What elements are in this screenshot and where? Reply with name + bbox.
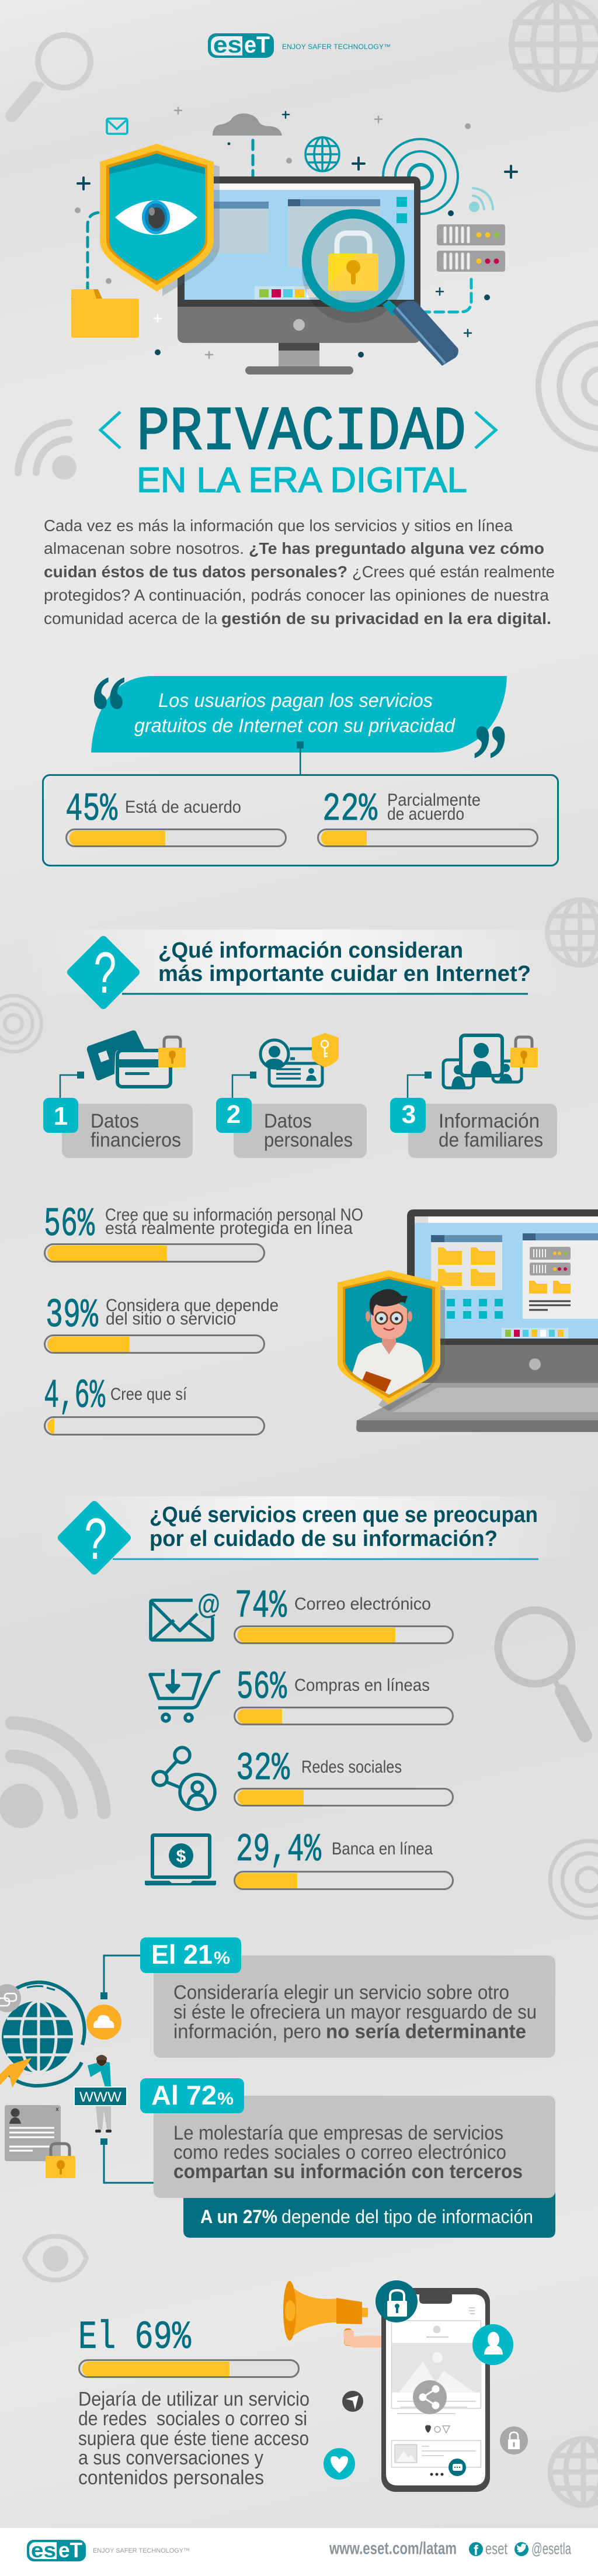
grey panel: [154, 2096, 555, 2198]
person with www sign: WWW: [79, 2089, 121, 2105]
quote text: gratuitos de Internet con su privacidad: [134, 715, 456, 736]
grey panel: [154, 1956, 555, 2058]
facebook handle: eset: [485, 2539, 507, 2558]
footer strip text: A un 27%: [200, 2206, 277, 2227]
person with www sign: [74, 2055, 127, 2133]
section heading: información: [23, 930, 575, 1011]
stat 22%: Parcialmente: [387, 791, 481, 810]
number box: [43, 1098, 78, 1133]
stat 45%: [65, 787, 286, 846]
label box: [62, 1104, 193, 1158]
dashed connector server to monitor: [420, 279, 471, 312]
description: Dejaría de utilizar un servicio: [78, 2388, 310, 2411]
folders: [438, 1247, 571, 1294]
intro paragraph: Cada vez es más la información que los servicios y sitios en línea: [44, 516, 513, 535]
icon: laptop with dollar: [145, 1835, 216, 1885]
footer strip text: depende del tipo de información: [281, 2206, 533, 2227]
body text: no sería determinante: [326, 2020, 526, 2043]
value: 32%: [236, 1746, 290, 1791]
label: Datos: [264, 1110, 312, 1132]
bg icon: eye: [25, 2237, 86, 2280]
logo: ESET header: [208, 32, 391, 58]
heading text: más importante cuidar en Internet?: [158, 962, 531, 986]
body text: [173, 1982, 537, 2043]
closing quote marks: ”: [472, 703, 508, 819]
badge text: %: [217, 2089, 234, 2109]
stats box: agreement: [43, 775, 558, 866]
bar: [235, 1789, 453, 1805]
stat: 39%: 39%: [46, 1293, 99, 1339]
value: 74%: [235, 1584, 287, 1629]
laptop illustration: [338, 1209, 598, 1432]
icon: gray lock badge: [500, 2426, 528, 2454]
monitor: [178, 176, 420, 375]
service: compras en líneas: [150, 1665, 453, 1725]
megaphone with hand: [283, 2281, 381, 2348]
logo: ESET footer: [27, 2538, 86, 2562]
bg icon: target section 2: [0, 996, 41, 1052]
label box: [234, 1104, 367, 1158]
bg icon: target section 3: [550, 1841, 598, 1918]
icon: chat badge: [448, 2459, 466, 2476]
icon: lock badge: [376, 2280, 418, 2322]
description: [78, 2388, 310, 2489]
intro paragraph: ¿Te has preguntado alguna vez cómo: [249, 539, 544, 557]
body text: como redes sociales o correo electrónico: [173, 2141, 506, 2164]
value: El 69%: [78, 2315, 191, 2360]
icon: envelope with at sign: [151, 1589, 220, 1640]
icon: send badge: [342, 2391, 363, 2412]
globe: [0, 1982, 85, 2086]
label: Compras en líneas: [294, 1676, 430, 1695]
bg icon: magnifier top left: [12, 35, 91, 116]
heading underline: [113, 1558, 538, 1560]
icon: link bubble: [0, 1984, 21, 2012]
stat: 39%: del sitio o servicio: [106, 1309, 236, 1329]
bg icon: globe section 2: [547, 900, 598, 965]
icon: facebook: [469, 2542, 483, 2558]
icon: cloud: [213, 113, 282, 136]
badge text: %: [214, 1949, 230, 1968]
globe and people illustration: [0, 1982, 127, 2178]
number: 2: [227, 1100, 241, 1129]
label: de familiares: [439, 1129, 543, 1151]
description: supiera que éste tiene acceso: [78, 2428, 309, 2450]
heading text: [158, 938, 531, 986]
number box: [390, 1098, 426, 1133]
body text: si éste le ofreciera un mayor resguardo de su: [173, 2001, 537, 2023]
heading text: ¿Qué servicios creen que se preocupan: [150, 1503, 538, 1527]
icon: share network: [153, 1748, 215, 1809]
stat: 4,6%: Cree que sí: [110, 1385, 187, 1404]
body text: Consideraría elegir un servicio sobre otro: [173, 1982, 509, 2004]
badge text: El 21: [151, 1939, 213, 1970]
icon: heart badge: [324, 2448, 355, 2480]
intro paragraph: [44, 516, 555, 627]
section heading: servicios: [35, 1496, 586, 1578]
person: [352, 1289, 425, 1395]
title: [100, 397, 496, 500]
dashed connector shield to folder: [88, 213, 98, 289]
body text: [173, 2122, 523, 2183]
icon: id card with key shield: [260, 1033, 339, 1086]
dark footer strip: [183, 2185, 555, 2238]
bg icon: globe bottom: [550, 2439, 598, 2505]
stat 45%: 45%: [65, 787, 117, 832]
teal badge: [140, 1937, 241, 1973]
question diamond: [62, 1505, 127, 1570]
number: 3: [402, 1100, 416, 1129]
bar: [235, 1872, 453, 1889]
heading text: por el cuidado de su información?: [150, 1527, 498, 1551]
icon: twitter: [514, 2542, 529, 2556]
title line 1: PRIVACIDAD: [137, 397, 466, 467]
hero illustration: [71, 108, 517, 375]
description: a sus conversaciones y: [78, 2447, 263, 2469]
heading text: [150, 1503, 538, 1551]
quote text: Los usuarios pagan los servicios: [158, 689, 433, 711]
teal badge: [140, 2078, 244, 2113]
label: [264, 1110, 353, 1151]
logo: ESET header: eT: [244, 32, 270, 58]
heading underline: [122, 993, 528, 994]
icon: folder: [71, 289, 139, 338]
stat 45%: Está de acuerdo: [125, 798, 241, 817]
stat: 69%: [78, 2315, 310, 2489]
icon: servers: [437, 224, 505, 272]
icon: target rings: [383, 139, 458, 214]
label: [439, 1110, 543, 1151]
title line 2: EN LA ERA DIGITAL: [137, 460, 467, 500]
laptop body: [356, 1345, 598, 1432]
logo: ESET footer: eT: [58, 2538, 82, 2562]
icon: orange arrow: [0, 2058, 32, 2088]
quote bubble: [91, 676, 507, 753]
bg icon: wifi left: [18, 422, 77, 480]
question diamond: [71, 940, 135, 1005]
quote callout: [91, 654, 508, 819]
bg icon: globe top right: [512, 0, 598, 89]
stat: 56%: [44, 1202, 363, 1262]
shield shadow: [378, 1285, 445, 1411]
label: Correo electrónico: [294, 1594, 431, 1614]
body text: información, pero: [173, 2020, 321, 2043]
title decoration: chevrons: [100, 412, 496, 448]
intro paragraph: cuidan éstos de tus datos personales?: [44, 563, 347, 581]
question mark: ?: [93, 942, 118, 1011]
item 1: datos financieros: [43, 1031, 193, 1158]
item 3: información de familiares: [390, 1035, 557, 1158]
tagline: ENJOY SAFER TECHNOLOGY™: [93, 2547, 190, 2554]
badge text: Al 72: [151, 2080, 217, 2110]
bg icon: wifi section 3: [0, 1723, 104, 1828]
number: 1: [54, 1102, 68, 1131]
icon: user badge: [472, 2324, 513, 2365]
description: contenidos personales: [78, 2467, 264, 2489]
logo: ESET header: ENJOY SAFER TECHNOLOGY™: [282, 43, 391, 51]
icon: shopping cart: [150, 1669, 220, 1721]
intro paragraph: protegidos? A continuación, podrás conocer las opiniones de nuestra: [44, 586, 549, 604]
stat: 39%: [44, 1293, 279, 1353]
icon: credit cards with lock: [87, 1031, 186, 1087]
shield with eye: [100, 144, 220, 296]
label: financieros: [91, 1129, 181, 1151]
connector: [100, 1956, 141, 1999]
mini servers: [530, 1247, 571, 1275]
service: redes sociales: [153, 1746, 453, 1809]
small decorations: crosses and dots: [75, 108, 517, 358]
callout: 21%: [100, 1937, 555, 2058]
callout: 72%: [100, 2078, 555, 2238]
icon: facebook: f: [474, 2543, 479, 2558]
icon: globe: [305, 137, 339, 171]
website: www.eset.com/latam: [329, 2539, 457, 2558]
bar: [235, 1707, 453, 1725]
profile card: [5, 2105, 75, 2178]
body text: Le molestaría que empresas de servicios: [173, 2122, 503, 2144]
magnifier with lock: [302, 214, 458, 366]
item 2: datos personales: [216, 1033, 367, 1158]
icon: envelope with at sign: @: [197, 1589, 220, 1620]
label: personales: [264, 1129, 353, 1151]
label box: [408, 1104, 557, 1158]
description: de redes sociales o correo si: [78, 2408, 307, 2430]
twitter handle: @esetla: [531, 2539, 571, 2558]
heading text: ¿Qué información consideran: [158, 938, 463, 963]
icon: cloud badge: [86, 2005, 121, 2040]
value: 29,4%: [236, 1828, 321, 1873]
label: Información: [439, 1110, 540, 1132]
icon: share badge: [413, 2380, 447, 2414]
label: Redes sociales: [301, 1757, 402, 1777]
laptop screen: [407, 1209, 598, 1345]
service: correo electrónico: [151, 1584, 453, 1643]
opening quote marks: “: [91, 654, 127, 770]
shield with person: [338, 1270, 440, 1404]
stat 22%: [318, 787, 537, 846]
stat 22%: 22%: [322, 787, 377, 832]
question mark: ?: [84, 1509, 109, 1578]
bg icon: magnifier section 3: [498, 1610, 585, 1735]
phone: [381, 2288, 490, 2492]
stat: 56%: 56%: [44, 1202, 95, 1248]
service: banca en línea: [145, 1828, 453, 1889]
profile card: x: [55, 2106, 59, 2113]
label: Banca en línea: [332, 1839, 433, 1859]
bar: [235, 1627, 453, 1643]
intro paragraph: ¿Crees qué están realmente: [352, 563, 555, 581]
stat: 4,6%: [44, 1374, 264, 1435]
dashed connector cloud to monitor: [251, 140, 255, 176]
label: Datos: [91, 1110, 139, 1132]
number box: [216, 1098, 252, 1133]
bg icon: target hero: [538, 323, 598, 449]
stat 22%: de acuerdo: [387, 805, 464, 824]
connector: [297, 741, 304, 775]
label: [91, 1110, 181, 1151]
connector: [100, 2138, 154, 2183]
icon: envelope: [107, 119, 127, 134]
connector: [60, 1072, 84, 1098]
icon: laptop with dollar: $: [176, 1847, 186, 1866]
value: 56%: [237, 1665, 287, 1710]
intro paragraph: comunidad acerca de la: [44, 609, 217, 627]
icon: wifi: [469, 188, 493, 212]
bar: [79, 2360, 299, 2377]
connector: [232, 1072, 256, 1098]
logo: ESET header: es: [213, 32, 242, 58]
intro paragraph: almacenan sobre nosotros.: [44, 539, 244, 557]
quote text: [134, 689, 456, 736]
intro paragraph: gestión de su privacidad en la era digital.: [221, 609, 551, 627]
logo: ESET footer: es: [31, 2538, 56, 2562]
stat: 56%: está realmente protegida en línea: [105, 1219, 353, 1238]
icon: family photos with lock: [443, 1035, 538, 1088]
footer: [0, 2528, 598, 2576]
stat: 56%: Cree que su información personal NO: [105, 1205, 363, 1225]
phone and megaphone illustration: [283, 2280, 528, 2492]
stat: 39%: Considera que depende: [106, 1296, 279, 1315]
stat: 4,6%: 4,6%: [44, 1374, 106, 1420]
connector: [408, 1072, 432, 1098]
body text: compartan su información con terceros: [173, 2161, 523, 2183]
